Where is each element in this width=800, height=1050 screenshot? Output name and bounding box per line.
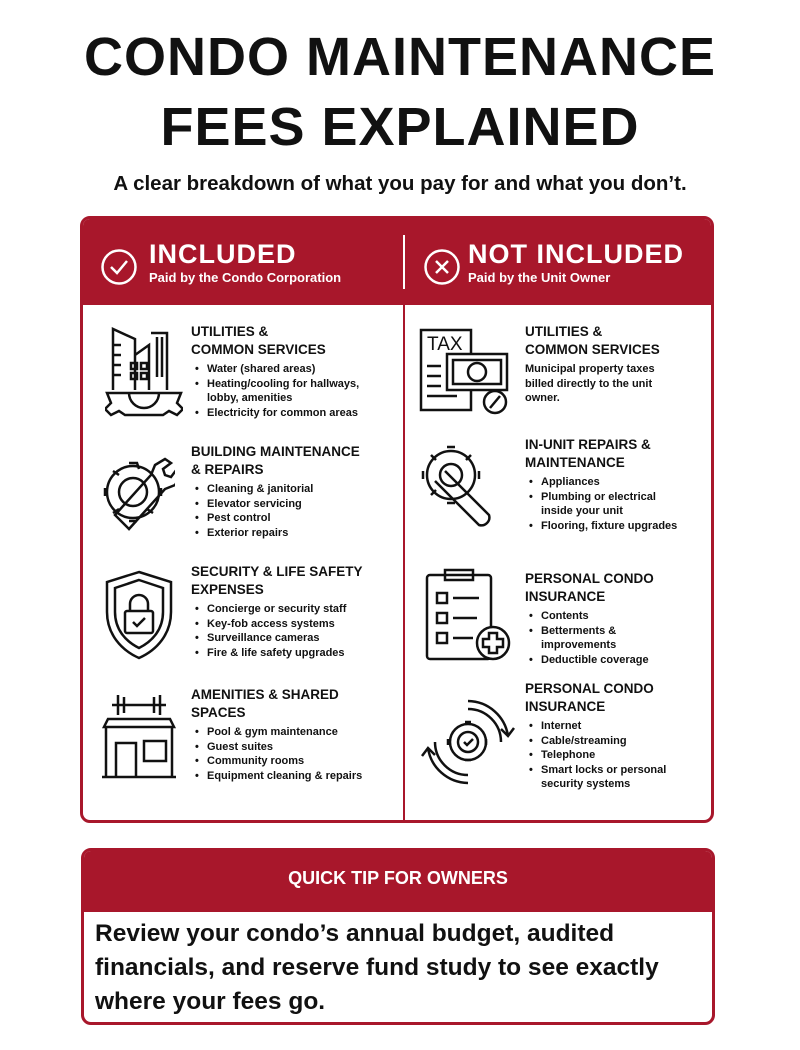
item: property taxes [525, 324, 660, 404]
item: utilities (included): Water (shared areas) [207, 363, 315, 375]
item: security: Surveillance cameras [207, 632, 320, 644]
icon: buildings gear [105, 327, 183, 416]
heading: included [149, 239, 341, 285]
heading: included: Paid by the Condo Corporation [149, 270, 341, 285]
item: building maintenance: BUILDING MAINTENANCE [191, 444, 360, 459]
item: building maintenance: & REPAIRS [191, 462, 264, 477]
tip header [84, 851, 712, 912]
icon: x circle [424, 249, 460, 285]
item: personal insurance: Contents [541, 610, 589, 622]
item: building maintenance: Cleaning & janitorial [207, 483, 313, 495]
icon: gym storefront [102, 695, 176, 778]
panel header [83, 219, 711, 305]
item: utilities (included): Electricity for common areas [207, 406, 358, 418]
title [84, 27, 716, 157]
item: services: Internet [541, 720, 581, 732]
item: in-unit repairs [525, 437, 677, 532]
item: in-unit repairs: Appliances [541, 476, 600, 488]
item: building maintenance: Pest control [207, 512, 271, 524]
item: services: Telephone [541, 749, 595, 761]
item: utilities (included): COMMON SERVICES [191, 342, 326, 357]
heading: included: INCLUDED [149, 239, 296, 269]
item: security: Key-fob access systems [207, 618, 335, 630]
item: in-unit repairs: MAINTENANCE [525, 455, 625, 470]
item: amenities [191, 687, 362, 782]
item: building maintenance: Exterior repairs [207, 526, 288, 538]
item: amenities: Community rooms [207, 755, 304, 767]
tip text: Review your condo’s annual budget, audited financials, and reserve fund study to see exactly where your fees go. [95, 920, 659, 1015]
item: amenities: Equipment cleaning & repairs [207, 770, 362, 782]
item: services: Cable/streaming [541, 734, 627, 746]
item: services: PERSONAL CONDO [525, 681, 654, 696]
title: FEES EXPLAINED [160, 97, 640, 157]
title: CONDO MAINTENANCE [84, 27, 716, 87]
item: amenities: Pool & gym maintenance [207, 726, 338, 738]
item: services: INSURANCE [525, 699, 605, 714]
heading: not included [468, 239, 684, 285]
item: personal insurance: Betterments & improvements [541, 624, 616, 651]
item: building maintenance: Elevator servicing [207, 498, 302, 510]
icon: shield lock [106, 570, 172, 660]
item: personal insurance: INSURANCE [525, 589, 605, 604]
heading: not included: NOT INCLUDED [468, 239, 684, 269]
item: personal insurance: Deductible coverage [541, 654, 649, 666]
icon: gear cycle [421, 700, 515, 784]
item: utilities (included): Heating/cooling for hallways, lobby, amenities [207, 378, 359, 404]
item: services: Smart locks or personal security systems [541, 764, 666, 790]
icon: tax document [420, 328, 508, 414]
icon: gear wrench 2 [422, 446, 491, 527]
item: property taxes: COMMON SERVICES [525, 342, 660, 357]
icon: clipboard medical [426, 568, 510, 660]
item: security: Concierge or security staff [207, 603, 346, 615]
item: property taxes: Municipal property taxes billed directly to the unit owner. [525, 363, 655, 404]
subtitle: A clear breakdown of what you pay for and what you don’t. [113, 172, 687, 195]
item: personal insurance [525, 571, 654, 666]
item: security [191, 564, 363, 658]
item: in-unit repairs: Flooring, fixture upgrades [541, 520, 677, 532]
icon: tax document: TAX [427, 334, 463, 355]
item: in-unit repairs: Plumbing or electrical inside your unit [541, 490, 656, 517]
icon: gear wrench [104, 458, 175, 531]
item: security: SECURITY & LIFE SAFETY [191, 564, 363, 579]
item: amenities: Guest suites [207, 740, 273, 752]
item: property taxes: UTILITIES & [525, 324, 602, 339]
item: utilities (included) [191, 324, 359, 418]
item: amenities: SPACES [191, 705, 246, 720]
item: personal insurance: PERSONAL CONDO [525, 571, 654, 586]
icon: check circle [101, 249, 137, 285]
callout: quick tip [81, 848, 715, 1025]
item: amenities: AMENITIES & SHARED [191, 687, 339, 702]
panel: included vs not included [80, 216, 714, 823]
tip header: QUICK TIP FOR OWNERS [288, 868, 508, 888]
item: building maintenance [191, 444, 360, 538]
item: in-unit repairs: IN-UNIT REPAIRS & [525, 437, 651, 452]
item: utilities (included): UTILITIES & [191, 324, 268, 339]
item: services [525, 681, 666, 790]
item: security: EXPENSES [191, 582, 264, 597]
heading: not included: Paid by the Unit Owner [468, 270, 610, 285]
item: security: Fire & life safety upgrades [207, 646, 345, 658]
